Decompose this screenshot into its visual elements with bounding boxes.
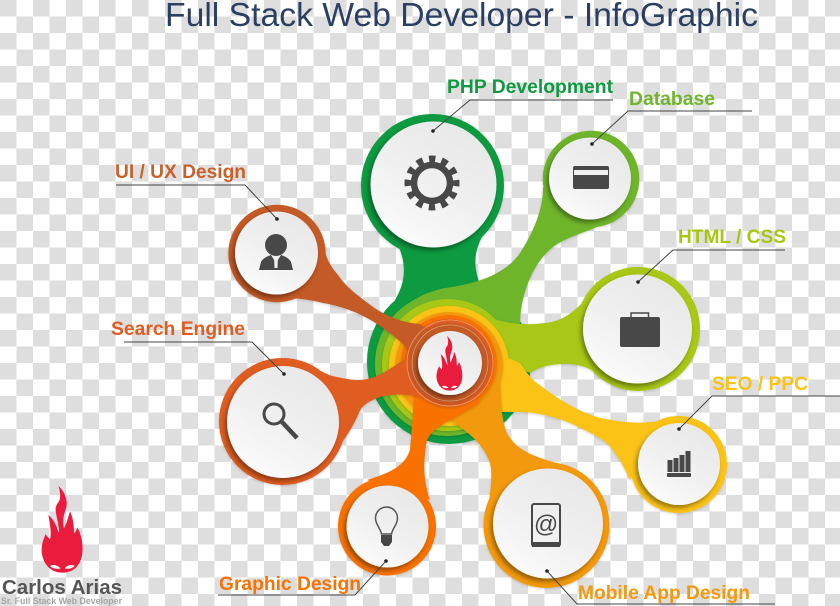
label: Mobile App Design: Mobile App Design	[578, 583, 750, 604]
arm: PHP Development	[361, 114, 531, 444]
label: Search Engine: Search Engine	[111, 319, 245, 340]
icon: gear	[408, 159, 456, 207]
label: SEO / PPC: SEO / PPC	[712, 374, 808, 395]
center node with flame	[418, 331, 482, 395]
node: SEO / PPC	[638, 423, 720, 505]
arm: Database	[375, 131, 639, 436]
node: Database	[549, 138, 631, 220]
center inner ring highlights	[407, 320, 493, 406]
leader lines	[116, 100, 840, 604]
node: HTML / CSS	[583, 274, 692, 384]
node: UI / UX Design	[235, 212, 318, 294]
leader line dots	[275, 129, 681, 573]
node: PHP Development	[370, 122, 496, 248]
label: HTML / CSS: HTML / CSS	[678, 227, 786, 248]
arm: UI / UX Design	[228, 205, 489, 403]
arm: HTML / CSS	[382, 267, 700, 431]
icon: user	[259, 234, 293, 270]
node: Search Engine	[227, 366, 339, 478]
logo subtitle: Sr. Full Stack Web Developer	[1, 596, 122, 606]
label: PHP Development: PHP Development	[447, 77, 614, 98]
arm: Search Engine	[219, 319, 493, 485]
arm: Graphic Design	[338, 315, 497, 576]
logo name: Carlos Arias	[2, 577, 122, 599]
icon: card	[573, 166, 609, 189]
icon: briefcase	[620, 313, 660, 347]
icon: logo flame	[42, 486, 83, 573]
arm: SEO / PPC	[389, 306, 727, 513]
label: UI / UX Design: UI / UX Design	[115, 162, 246, 183]
node: Graphic Design	[346, 486, 428, 568]
icon: bar chart	[667, 451, 691, 477]
logo: Carlos Arias	[1, 486, 122, 606]
icon: tablet: @	[534, 511, 558, 538]
node: Mobile App Design	[493, 468, 603, 578]
icon: light bulb	[376, 507, 398, 546]
icon: flame	[436, 336, 462, 391]
label: Graphic Design: Graphic Design	[219, 574, 361, 595]
label: Database: Database	[629, 89, 715, 110]
icon: magnifier	[264, 404, 297, 438]
arm: Mobile App Design	[395, 312, 610, 588]
